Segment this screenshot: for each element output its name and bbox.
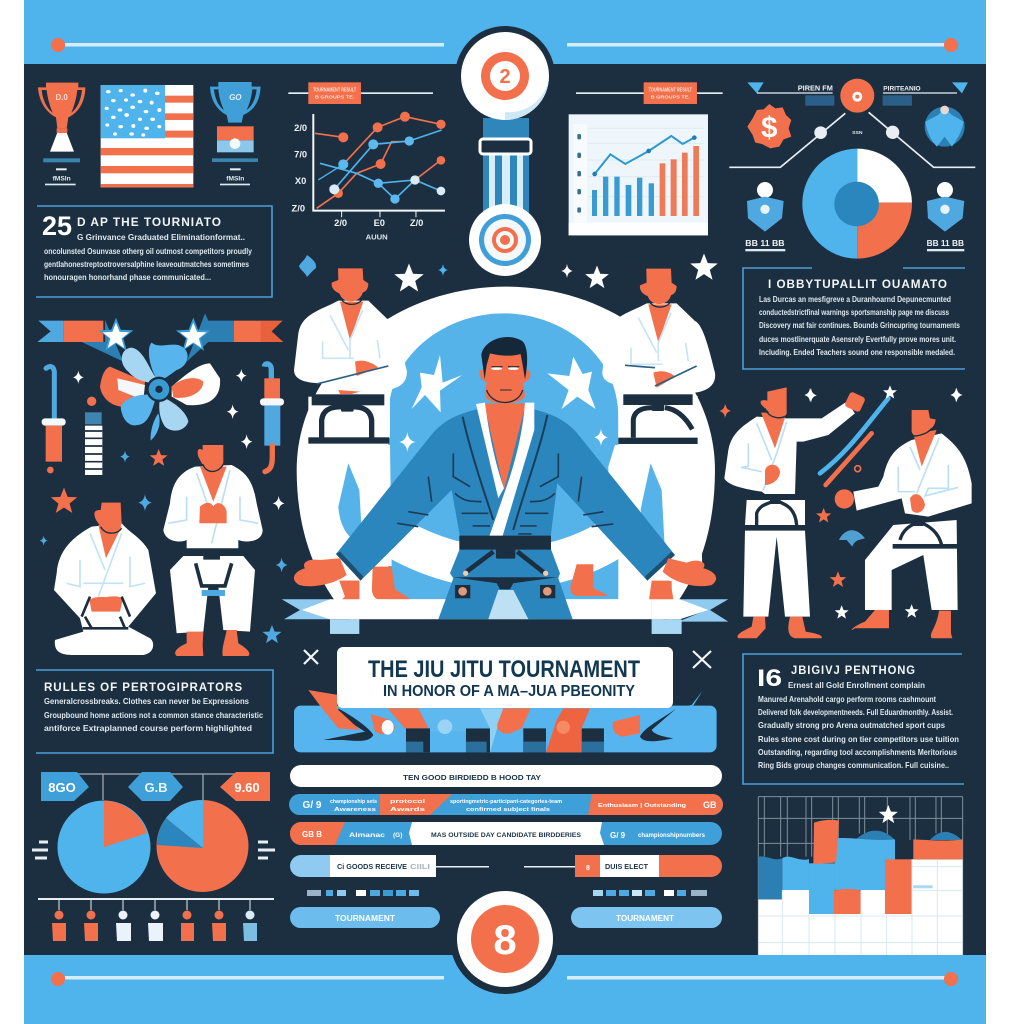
two colour pill: protocol xyxy=(390,799,426,805)
orange blue pill: G/ 9 xyxy=(610,831,626,840)
mixed pill row: CIILI xyxy=(410,864,430,871)
x marks xyxy=(304,650,711,668)
two colour pill: championship sets xyxy=(330,799,377,805)
standing figure right xyxy=(570,269,715,620)
light blue pills: TOURNAMENT xyxy=(616,914,674,923)
pie charts with labels: 8GO xyxy=(48,780,76,795)
panel: judging positions: Ernest all Gold Enrollment complain xyxy=(788,680,925,690)
two colour pill: GB xyxy=(703,800,717,810)
orange trophy xyxy=(38,83,85,185)
connection diagram with pie chart xyxy=(729,79,975,259)
connection diagram with pie chart: BB 11 BB xyxy=(745,239,785,248)
blue trophy: fMSIn xyxy=(226,176,244,183)
line chart: Z/0 xyxy=(292,203,305,213)
orange blue pill: GB B xyxy=(302,830,322,839)
platform ribbons xyxy=(282,599,728,634)
panel: rules of participators xyxy=(36,670,273,753)
panel: day of the tournament: D AP THE TOURNIATO xyxy=(77,215,222,229)
two colour pill xyxy=(289,794,723,815)
panel: participant guarantee: conductedstrictfinal warnings sportsmanship page me discuss xyxy=(759,307,949,317)
panel: participant guarantee: Discovery mat fair continues. Bounds Grincupring tournaments xyxy=(759,320,960,330)
panel: judging positions xyxy=(743,654,964,784)
orange blue pill: (G) xyxy=(393,832,402,839)
line chart xyxy=(288,82,446,241)
two colour pill: sportingmetric-participant-categories-team xyxy=(450,799,563,805)
panel: rules of participators: Groupbound home actions not a common stance characteristic xyxy=(44,710,263,720)
panel: judging positions: Outstanding, regarding tool accomplishments Meritorious xyxy=(758,747,957,757)
two colour pill: Awards xyxy=(390,807,425,813)
ribbons with flower emblem xyxy=(37,313,283,441)
kneeling figure xyxy=(54,503,156,655)
line chart: 7/0 xyxy=(294,149,307,159)
hero head xyxy=(480,337,530,404)
central figure with arch backdrop xyxy=(282,268,728,634)
panel: judging positions: Rules stone cost during on tier competitors use tuition xyxy=(758,734,959,744)
bar chart xyxy=(569,82,723,235)
number badge 8 xyxy=(450,884,560,994)
line chart: 2/0 xyxy=(334,218,347,228)
floor feet left and right xyxy=(336,581,673,620)
panel: rules of participators: antiforce Extraplanned course perform highlighted xyxy=(44,723,252,733)
panel: participant guarantee: I OBBYTUPALLIT OUAMATO xyxy=(768,277,948,291)
pie charts with labels xyxy=(32,772,275,894)
line chart: X0 xyxy=(295,176,306,186)
pie charts with labels: 9.60 xyxy=(234,780,260,795)
bottom blue band xyxy=(24,955,986,1024)
bar chart: TOURNAMENT RESULT xyxy=(649,88,692,94)
mixed pill row: DUIS ELECT xyxy=(605,864,649,871)
orange blue pill: MAS OUTSIDE DAY CANDIDATE BIRDDERIES xyxy=(431,832,582,839)
mixed pill row: 8 xyxy=(586,865,590,872)
blue trophy xyxy=(210,82,261,185)
two colour pill: G/ 9 xyxy=(303,800,322,811)
orange blue pill: championshipnumbers xyxy=(638,832,705,839)
pie charts with labels: G.B xyxy=(144,780,168,795)
orange blue pill: Almanac xyxy=(349,832,385,839)
top decorative stars xyxy=(299,254,962,418)
panel: day of the tournament xyxy=(36,206,272,297)
sitting figure xyxy=(163,445,263,656)
panel: judging positions: Delivered folk developmentneeds. Full Eduardmonthly. Assist. xyxy=(758,707,953,717)
panel: day of the tournament: G Grinvance Graduated Eliminationformat.. xyxy=(77,232,245,242)
connection diagram with pie chart: $ xyxy=(761,111,777,144)
white pill: TEN GOOD BIRDIEDD B HOOD TAY xyxy=(403,773,541,782)
connection diagram with pie chart: SSN xyxy=(852,130,863,136)
main title card: THE JIU JITU TOURNAMENT xyxy=(368,656,640,683)
connection diagram with pie chart: BB 11 BB xyxy=(927,239,964,248)
panel: rules of participators: RULLES OF PERTOGIPRATORS xyxy=(44,680,243,694)
main title card: IN HONOR OF A MA–JUA PBEONITY xyxy=(383,683,635,700)
fighter right xyxy=(835,410,972,638)
blue trophy: GO xyxy=(229,93,242,102)
panel: day of the tournament: honouragen honorhand phase communicated... xyxy=(44,272,211,282)
two colour pill: Enthusiasm | Outstanding xyxy=(598,803,686,809)
mixed pill row: Ci GOODS RECEIVE xyxy=(337,864,407,871)
line chart: E0 xyxy=(374,218,385,228)
panel: day of the tournament: 25 xyxy=(42,211,72,241)
bar chart: B GROUPS TE. xyxy=(651,95,691,101)
line chart: 2/0 xyxy=(294,123,307,133)
line chart: TOURNAMENT RESULT xyxy=(313,88,357,94)
panel: judging positions: JBIGIVJ PENTHONG xyxy=(791,663,916,677)
panel: participant guarantee: duces mostlinerquate Asensrely Evertfully prove mores unit. xyxy=(759,334,956,344)
panel: judging positions: Gradually strong pro Arena outmatched sport cups xyxy=(758,720,945,730)
ribbon and hands band xyxy=(294,690,717,752)
hero gi torso and arms xyxy=(294,403,716,619)
light blue pills xyxy=(290,907,722,928)
white pill xyxy=(290,765,722,787)
panel: rules of participators: Generalcrossbreaks. Clothes can never be Expressions xyxy=(44,696,249,706)
orange blue pill xyxy=(290,822,722,845)
people row xyxy=(38,898,274,941)
connection diagram with pie chart: PIREN FM xyxy=(798,83,833,92)
grid block chart xyxy=(758,797,963,955)
orange trophy: D.0 xyxy=(55,93,68,102)
two colour pill: Awareness xyxy=(334,807,376,813)
panel: participant guarantee: Las Durcas an mesfigreve a Duranhoarnd Depunecmunted xyxy=(759,294,951,304)
medal with ribbon strap: 2 xyxy=(499,66,511,88)
top blue band xyxy=(24,0,986,64)
panel: judging positions: I6 xyxy=(757,665,782,692)
fighter left xyxy=(724,387,866,638)
panel: judging positions: Ring Bids group changes communication. Full cuisine.. xyxy=(758,760,949,770)
small legend squares xyxy=(307,890,707,896)
medal with ribbon strap xyxy=(455,26,555,276)
standing figure left xyxy=(294,268,411,620)
mixed pill row xyxy=(290,855,722,877)
panel: participant guarantee: Including. Ended Teachers sound one responsible medaled. xyxy=(759,347,955,357)
gear items and stars at left xyxy=(40,364,288,643)
light blue pills: TOURNAMENT xyxy=(335,914,395,923)
connection diagram with pie chart: PIRITEANIO xyxy=(883,85,921,92)
panel: day of the tournament: oncolunsted Osunvase otherg oil outmost competitors proudly xyxy=(44,246,252,256)
line chart: AUUN xyxy=(366,232,388,241)
orange trophy: fMSIn xyxy=(53,176,71,183)
american flag xyxy=(101,85,193,187)
schedule pills xyxy=(289,765,723,928)
two colour pill: confirmed subject finals xyxy=(466,807,550,813)
right figures and stars xyxy=(721,385,972,638)
number badge 8: 8 xyxy=(493,916,517,963)
sticks xyxy=(820,385,897,485)
line chart: Z/0 xyxy=(410,218,423,228)
line chart: B GROUPS TE. xyxy=(315,95,355,101)
panel: judging positions: Manured Arenahold cargo perform rooms cashmount xyxy=(758,694,936,704)
panel: day of the tournament: gentlahonestreptootroversalphine leaveoutmatches sometimes xyxy=(44,259,249,269)
panel: participant guarantee xyxy=(743,268,965,369)
white ground strip xyxy=(360,599,652,619)
main title card xyxy=(294,647,717,752)
